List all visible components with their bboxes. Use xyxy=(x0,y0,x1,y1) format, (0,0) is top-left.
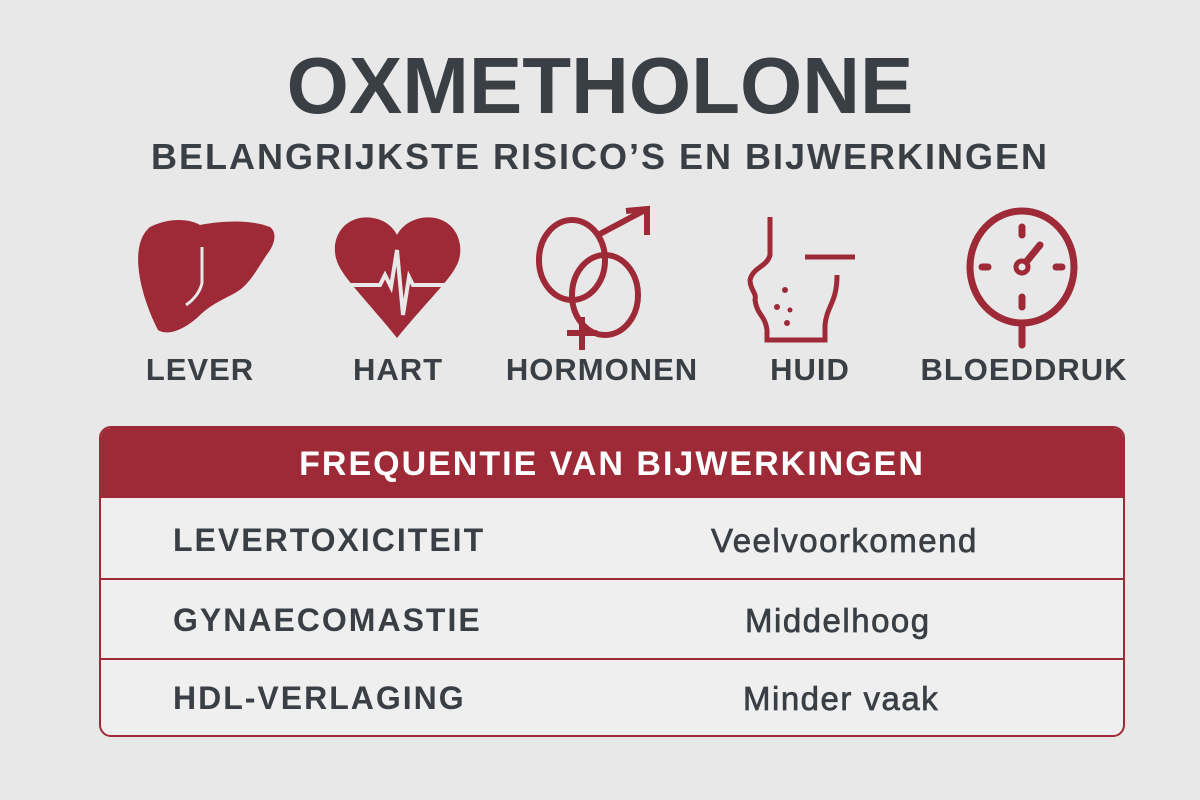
table panel xyxy=(99,426,1125,737)
icon: gender symbols xyxy=(536,206,650,350)
icon: liver xyxy=(138,220,274,332)
label: lever: LEVER xyxy=(146,352,254,387)
row: gynaecomastie: Middelhoog xyxy=(745,602,931,639)
row: gynaecomastie: GYNAECOMASTIE xyxy=(173,602,482,638)
subtitle: BELANGRIJKSTE RISICO’S EN BIJWERKINGEN xyxy=(151,136,1049,177)
icon: skin/face xyxy=(748,217,855,342)
title: OXMETHOLONE xyxy=(287,41,913,130)
label: hart: HART xyxy=(353,352,443,387)
table header xyxy=(101,428,1123,498)
row: levertoxiciteit xyxy=(101,500,1125,580)
label: huid: HUID xyxy=(770,352,850,387)
row: hdl-verlaging xyxy=(173,680,939,717)
label: hormonen: HORMONEN xyxy=(506,352,698,387)
row: gynaecomastie xyxy=(101,580,1125,660)
icon: heart xyxy=(334,217,460,338)
table header: FREQUENTIE VAN BIJWERKINGEN xyxy=(299,445,925,483)
row: levertoxiciteit: LEVERTOXICITEIT xyxy=(173,522,485,558)
row: hdl-verlaging: HDL-VERLAGING xyxy=(173,680,466,716)
icon: blood pressure gauge xyxy=(966,208,1078,348)
row: hdl-verlaging: Minder vaak xyxy=(743,680,939,717)
row: levertoxiciteit: Veelvoorkomend xyxy=(711,522,978,559)
label: bloeddruk: BLOEDDRUK xyxy=(920,352,1128,387)
